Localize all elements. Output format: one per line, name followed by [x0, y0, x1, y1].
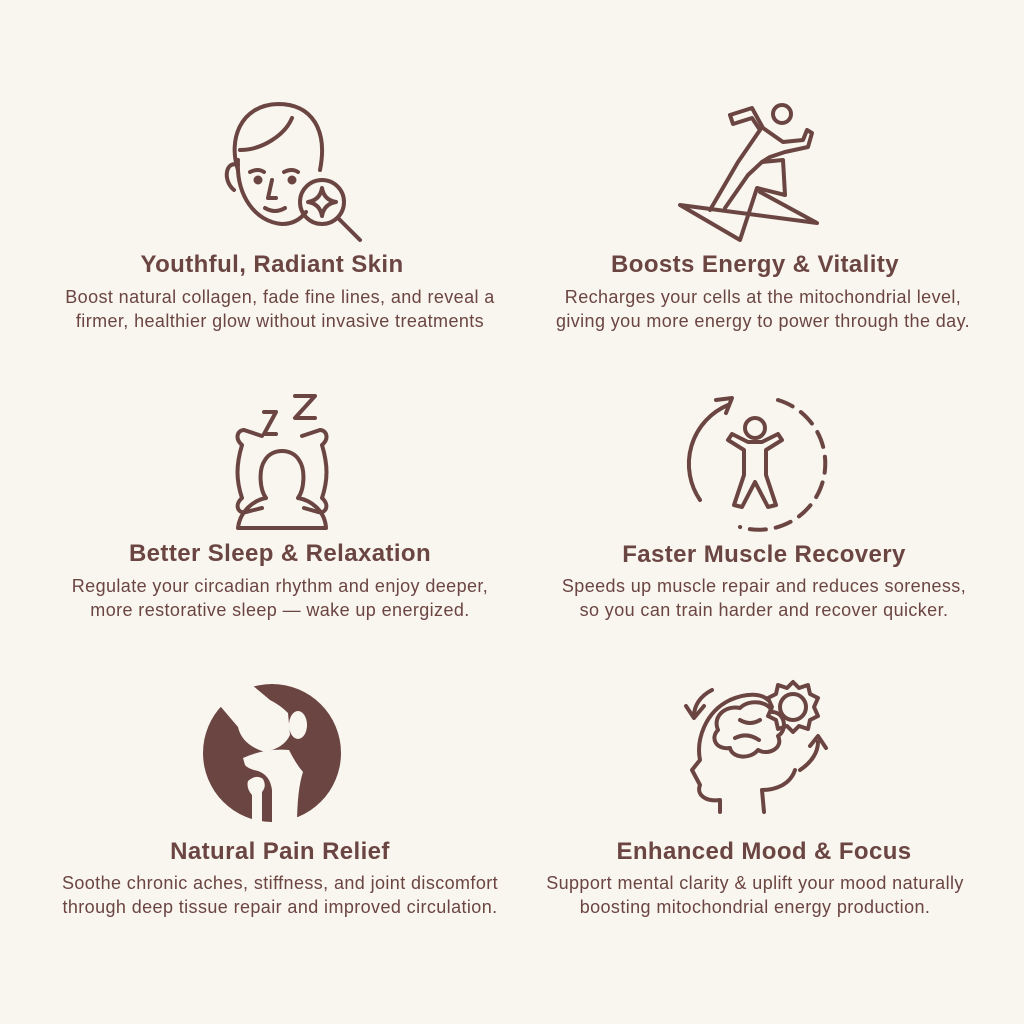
- text: sleep: more restorative sleep — wake up energized.: [90, 600, 470, 620]
- title: sleep: Better Sleep & Relaxation: [129, 540, 431, 567]
- icon: recovery: [686, 396, 828, 532]
- icon: sleep: [236, 394, 328, 530]
- text: youthful skin: firmer, healthier glow without invasive treatments: [76, 311, 484, 331]
- text: youthful skin: [65, 287, 495, 331]
- title: youthful skin: Youthful, Radiant Skin: [140, 251, 404, 278]
- text: mood focus: [546, 873, 964, 917]
- text: pain relief: Soothe chronic aches, stiffness, and joint discomfort: [62, 873, 498, 893]
- text: pain relief: through deep tissue repair and improved circulation.: [62, 897, 498, 917]
- text: recovery: Speeds up muscle repair and reduces soreness,: [562, 576, 966, 596]
- text: mood focus: Support mental clarity & uplift your mood naturally: [546, 873, 964, 893]
- text: sleep: Regulate your circadian rhythm and enjoy deeper,: [72, 576, 488, 596]
- text: mood focus: boosting mitochondrial energy production.: [580, 897, 930, 917]
- title: energy: Boosts Energy & Vitality: [611, 251, 899, 278]
- title: mood focus: Enhanced Mood & Focus: [616, 838, 912, 865]
- icon: brain head: [684, 680, 828, 814]
- title: recovery: Faster Muscle Recovery: [622, 541, 906, 568]
- icon: face with magnifier: [224, 102, 362, 242]
- icon: knee joint: [203, 684, 341, 822]
- text: recovery: so you can train harder and recover quicker.: [580, 600, 948, 620]
- text: energy: giving you more energy to power through the day.: [556, 311, 970, 331]
- title: pain relief: Natural Pain Relief: [170, 838, 390, 865]
- text: recovery: [562, 576, 966, 620]
- text: youthful skin: Boost natural collagen, fade fine lines, and reveal a: [65, 287, 495, 307]
- icon: runner: [678, 103, 819, 242]
- text: sleep: [72, 576, 488, 620]
- text: energy: Recharges your cells at the mitochondrial level,: [565, 287, 961, 307]
- text: pain relief: [62, 873, 498, 917]
- text: energy: [556, 287, 970, 331]
